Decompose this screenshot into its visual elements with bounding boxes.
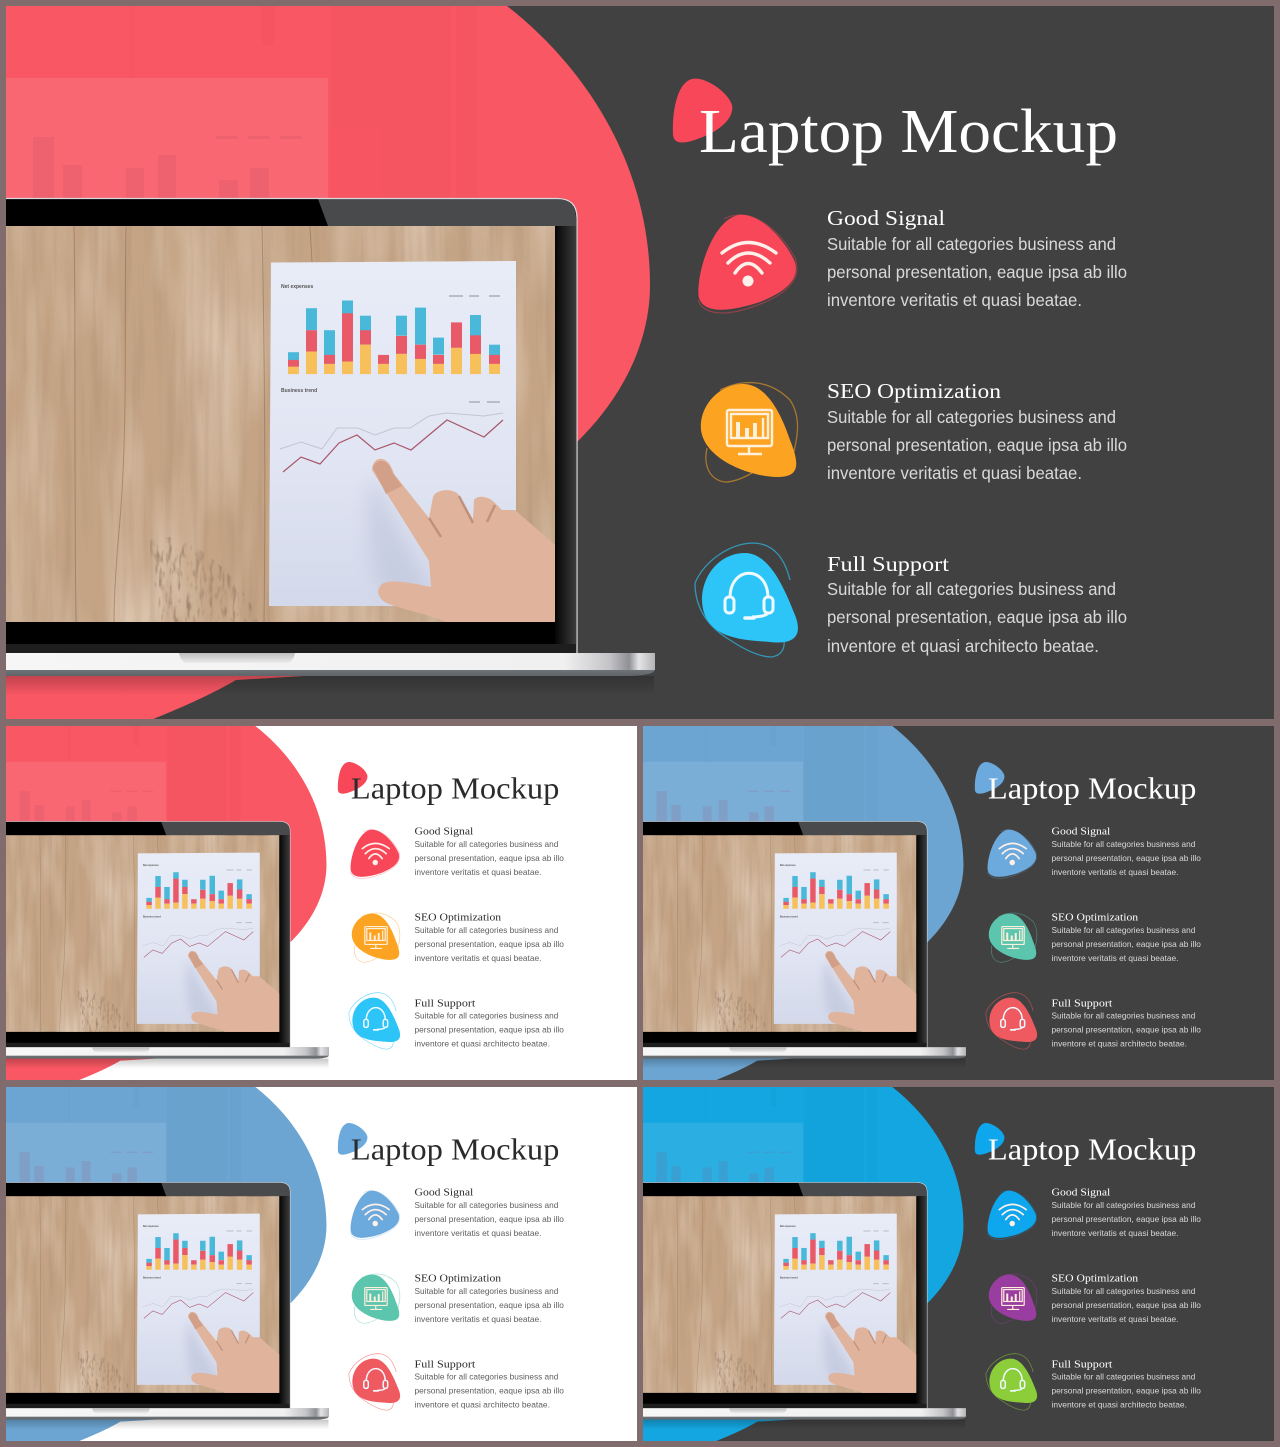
feature: Good Signal (1052, 1188, 1201, 1238)
feature: SEO Optimization: personal presentation, eaque ipsa ab illo (415, 939, 564, 949)
feature: Full Support (415, 999, 564, 1049)
feature: Full Support: personal presentation, eaque ipsa ab illo (1052, 1024, 1201, 1034)
feature: SEO Optimization (415, 1274, 564, 1324)
feature: Full Support (1052, 999, 1201, 1049)
feature: Full Support: Full Support (415, 1360, 475, 1371)
feature: SEO Optimization: Suitable for all categories business and (827, 407, 1116, 427)
feature: SEO Optimization: inventore veritatis et quasi beatae. (827, 463, 1082, 483)
icon: wifi blob (987, 1191, 1037, 1239)
laptop mockup with chart photo (642, 821, 966, 1069)
feature: SEO Optimization: personal presentation, eaque ipsa ab illo (827, 435, 1127, 455)
feature: Full Support (415, 1360, 564, 1410)
icon: wifi blob (987, 830, 1037, 878)
icon: headset blob (349, 993, 400, 1049)
feature: SEO Optimization: SEO Optimization (415, 913, 502, 924)
icon: wifi blob (698, 215, 797, 313)
feature: Full Support: inventore et quasi architecto beatae. (415, 1039, 550, 1049)
feature: Full Support (827, 552, 1127, 656)
feature: Good Signal: personal presentation, eaque ipsa ab illo (1052, 1214, 1201, 1224)
faded chart backdrop (6, 726, 241, 822)
faded chart backdrop (6, 1087, 241, 1183)
feature: Full Support: Suitable for all categories business and (415, 1010, 559, 1020)
title accent blob (975, 762, 1004, 794)
feature: Full Support: personal presentation, eaque ipsa ab illo (1052, 1385, 1201, 1395)
feature: SEO Optimization: inventore veritatis et quasi beatae. (415, 1314, 541, 1324)
feature: Full Support: Full Support (415, 999, 475, 1010)
feature: Good Signal (827, 206, 1127, 310)
icon: monitor blob (989, 913, 1037, 962)
feature: Good Signal: inventore veritatis et quasi beatae. (415, 1228, 541, 1238)
slide background (6, 726, 637, 1080)
feature: Good Signal: Suitable for all categories business and (1052, 839, 1196, 849)
feature: SEO Optimization (415, 913, 564, 963)
feature: Full Support (1052, 1360, 1201, 1410)
title: Laptop Mockup (351, 772, 559, 805)
feature: Full Support: personal presentation, eaque ipsa ab illo (415, 1024, 564, 1034)
feature: Full Support: Suitable for all categories business and (827, 579, 1116, 599)
feature: Full Support: inventore et quasi architecto beatae. (827, 636, 1099, 656)
panel: dark slide, soft blue theme (643, 726, 1274, 1080)
title accent blob (338, 762, 367, 794)
faded chart backdrop (6, 6, 478, 200)
feature: Good Signal (415, 827, 564, 877)
feature: Full Support: Full Support (827, 552, 949, 576)
feature: Good Signal: personal presentation, eaque ipsa ab illo (415, 1214, 564, 1224)
feature: SEO Optimization: SEO Optimization (827, 379, 1002, 403)
title: Laptop Mockup (988, 1133, 1196, 1166)
slide background (643, 1087, 1274, 1441)
blue blob backdrop (6, 1087, 326, 1441)
title: Laptop Mockup (699, 98, 1118, 166)
icon: headset blob (349, 1354, 400, 1410)
feature: Full Support: inventore et quasi architecto beatae. (1052, 1039, 1187, 1049)
feature: SEO Optimization: inventore veritatis et quasi beatae. (1052, 953, 1178, 963)
feature: SEO Optimization: personal presentation, eaque ipsa ab illo (1052, 939, 1201, 949)
feature: Good Signal: inventore veritatis et quasi beatae. (415, 867, 541, 877)
icon: wifi blob (350, 1191, 400, 1239)
feature: SEO Optimization: Suitable for all categories business and (1052, 925, 1196, 935)
feature: SEO Optimization (827, 379, 1127, 483)
icon: monitor blob (701, 383, 798, 482)
feature: Good Signal: inventore veritatis et quasi beatae. (827, 290, 1082, 310)
red blob backdrop (6, 726, 326, 1080)
panel: dark slide, bright blue theme (643, 1087, 1274, 1441)
laptop mockup with chart photo (4, 198, 655, 696)
panel: white slide, soft blue theme (6, 1087, 637, 1441)
feature: SEO Optimization: SEO Optimization (1052, 1274, 1139, 1285)
feature: Full Support: Suitable for all categories business and (1052, 1371, 1196, 1381)
icon: monitor blob (352, 913, 400, 962)
blue blob backdrop (643, 726, 963, 1080)
feature: Full Support: Suitable for all categories business and (1052, 1010, 1196, 1020)
panel: large dark slide, red theme (6, 6, 1274, 719)
title accent blob (673, 79, 732, 142)
feature: SEO Optimization: personal presentation, eaque ipsa ab illo (415, 1300, 564, 1310)
blue blob backdrop (643, 1087, 963, 1441)
feature: Full Support: Full Support (1052, 1360, 1112, 1371)
feature: Full Support: personal presentation, eaque ipsa ab illo (827, 607, 1127, 627)
feature: Full Support: Full Support (1052, 999, 1112, 1010)
slide background (6, 6, 1274, 719)
laptop mockup with chart photo (5, 821, 329, 1069)
feature: Good Signal (1052, 827, 1201, 877)
title: Laptop Mockup (988, 772, 1196, 805)
feature: Good Signal (415, 1188, 564, 1238)
icon: headset blob (695, 543, 798, 657)
feature: SEO Optimization: inventore veritatis et quasi beatae. (1052, 1314, 1178, 1324)
red blob backdrop (6, 6, 650, 720)
feature: Good Signal: Good Signal (415, 827, 473, 838)
feature: Good Signal: personal presentation, eaque ipsa ab illo (1052, 853, 1201, 863)
laptop mockup with chart photo (5, 1182, 329, 1430)
title accent blob (338, 1123, 367, 1155)
faded chart backdrop (643, 1087, 878, 1183)
feature: SEO Optimization (1052, 913, 1201, 963)
feature: Good Signal: personal presentation, eaque ipsa ab illo (827, 262, 1127, 282)
feature: Good Signal: Good Signal (827, 206, 945, 230)
feature: SEO Optimization: Suitable for all categories business and (415, 1286, 559, 1296)
feature: SEO Optimization: SEO Optimization (1052, 913, 1139, 924)
icon: wifi blob (350, 830, 400, 878)
feature: Good Signal: Good Signal (415, 1188, 473, 1199)
feature: Good Signal: Good Signal (1052, 1188, 1110, 1199)
title: Laptop Mockup (351, 1133, 559, 1166)
icon: monitor blob (352, 1274, 400, 1323)
faded chart backdrop (643, 726, 878, 822)
title accent blob (975, 1123, 1004, 1155)
feature: Good Signal: Suitable for all categories business and (415, 1200, 559, 1210)
feature: SEO Optimization: Suitable for all categories business and (415, 925, 559, 935)
feature: Good Signal: Good Signal (1052, 827, 1110, 838)
slide background (643, 726, 1274, 1080)
feature: Full Support: inventore et quasi architecto beatae. (415, 1400, 550, 1410)
feature: Full Support: personal presentation, eaque ipsa ab illo (415, 1385, 564, 1395)
feature: Full Support: Suitable for all categories business and (415, 1371, 559, 1381)
feature: SEO Optimization: Suitable for all categories business and (1052, 1286, 1196, 1296)
laptop mockup with chart photo (642, 1182, 966, 1430)
icon: monitor blob (989, 1274, 1037, 1323)
feature: Good Signal: Suitable for all categories business and (827, 234, 1116, 254)
feature: SEO Optimization: inventore veritatis et quasi beatae. (415, 953, 541, 963)
feature: Good Signal: inventore veritatis et quasi beatae. (1052, 1228, 1178, 1238)
feature: Good Signal: inventore veritatis et quasi beatae. (1052, 867, 1178, 877)
feature: SEO Optimization: personal presentation, eaque ipsa ab illo (1052, 1300, 1201, 1310)
feature: SEO Optimization: SEO Optimization (415, 1274, 502, 1285)
icon: headset blob (986, 993, 1037, 1049)
feature: Good Signal: Suitable for all categories business and (1052, 1200, 1196, 1210)
feature: Good Signal: Suitable for all categories business and (415, 839, 559, 849)
feature: Full Support: inventore et quasi architecto beatae. (1052, 1400, 1187, 1410)
feature: SEO Optimization (1052, 1274, 1201, 1324)
panel: white slide, red theme (6, 726, 637, 1080)
icon: headset blob (986, 1354, 1037, 1410)
slide background (6, 1087, 637, 1441)
feature: Good Signal: personal presentation, eaque ipsa ab illo (415, 853, 564, 863)
